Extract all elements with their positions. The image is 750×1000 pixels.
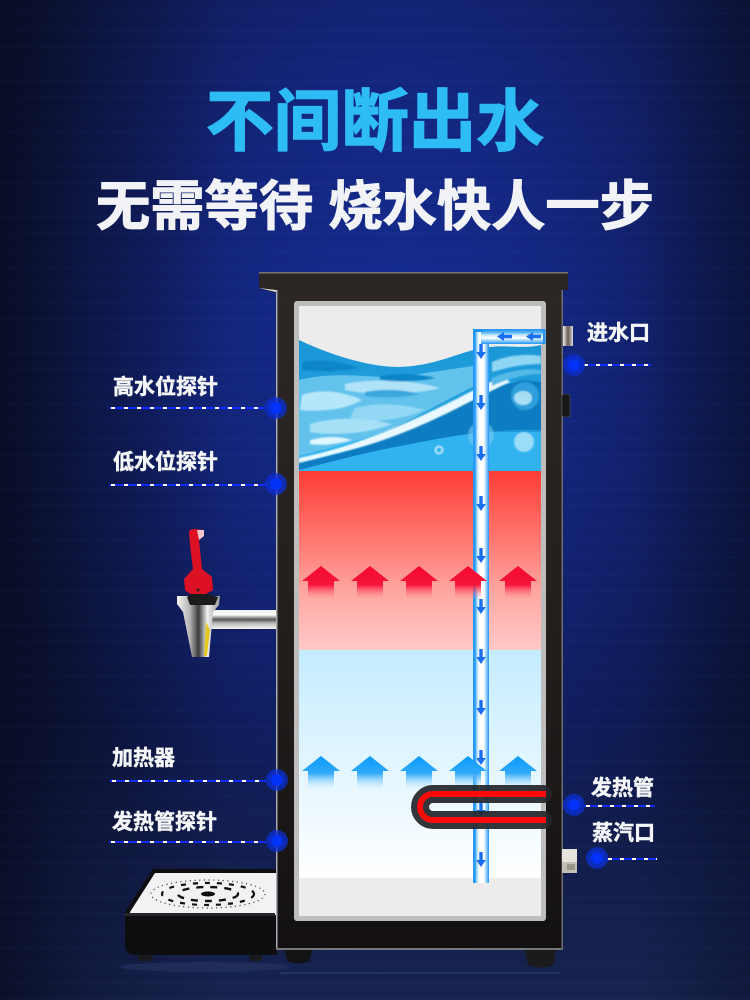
label: steam outlet [586,822,657,869]
title: 不间断出水 [206,85,544,160]
inlet fitting [563,326,573,346]
lid [259,272,568,293]
label: heating tube probe: 发热管探针 [112,811,217,834]
label: heater: 加热器 [112,747,175,770]
cool zone [299,650,541,878]
label: heating tube: 发热管 [591,777,654,800]
steam fitting [562,849,577,873]
drip tray [120,869,290,972]
label: heater [110,747,288,791]
heating tube [420,794,546,820]
water inlet tube [473,329,546,883]
label: steam outlet: 蒸汽口 [592,822,655,845]
subtitle: 无需等待 烧水快人一步 [96,177,654,237]
label: high water probe [109,375,287,419]
red heat arrows [302,566,537,600]
label: heating tube probe [109,811,288,852]
machine body [276,288,563,950]
hot zone [299,471,541,650]
label: low water probe [109,450,287,495]
label: high water probe: 高水位探针 [113,375,218,399]
window panel [294,301,546,921]
blue rising arrows [302,756,537,790]
water section [299,340,541,471]
switch [562,394,570,417]
feet [280,947,560,974]
label: water inlet: 进水口 [587,322,650,345]
label: low water probe: 低水位探针 [113,450,218,474]
faucet [177,529,276,657]
label: water inlet [563,322,651,376]
label: heating tube [563,777,655,816]
